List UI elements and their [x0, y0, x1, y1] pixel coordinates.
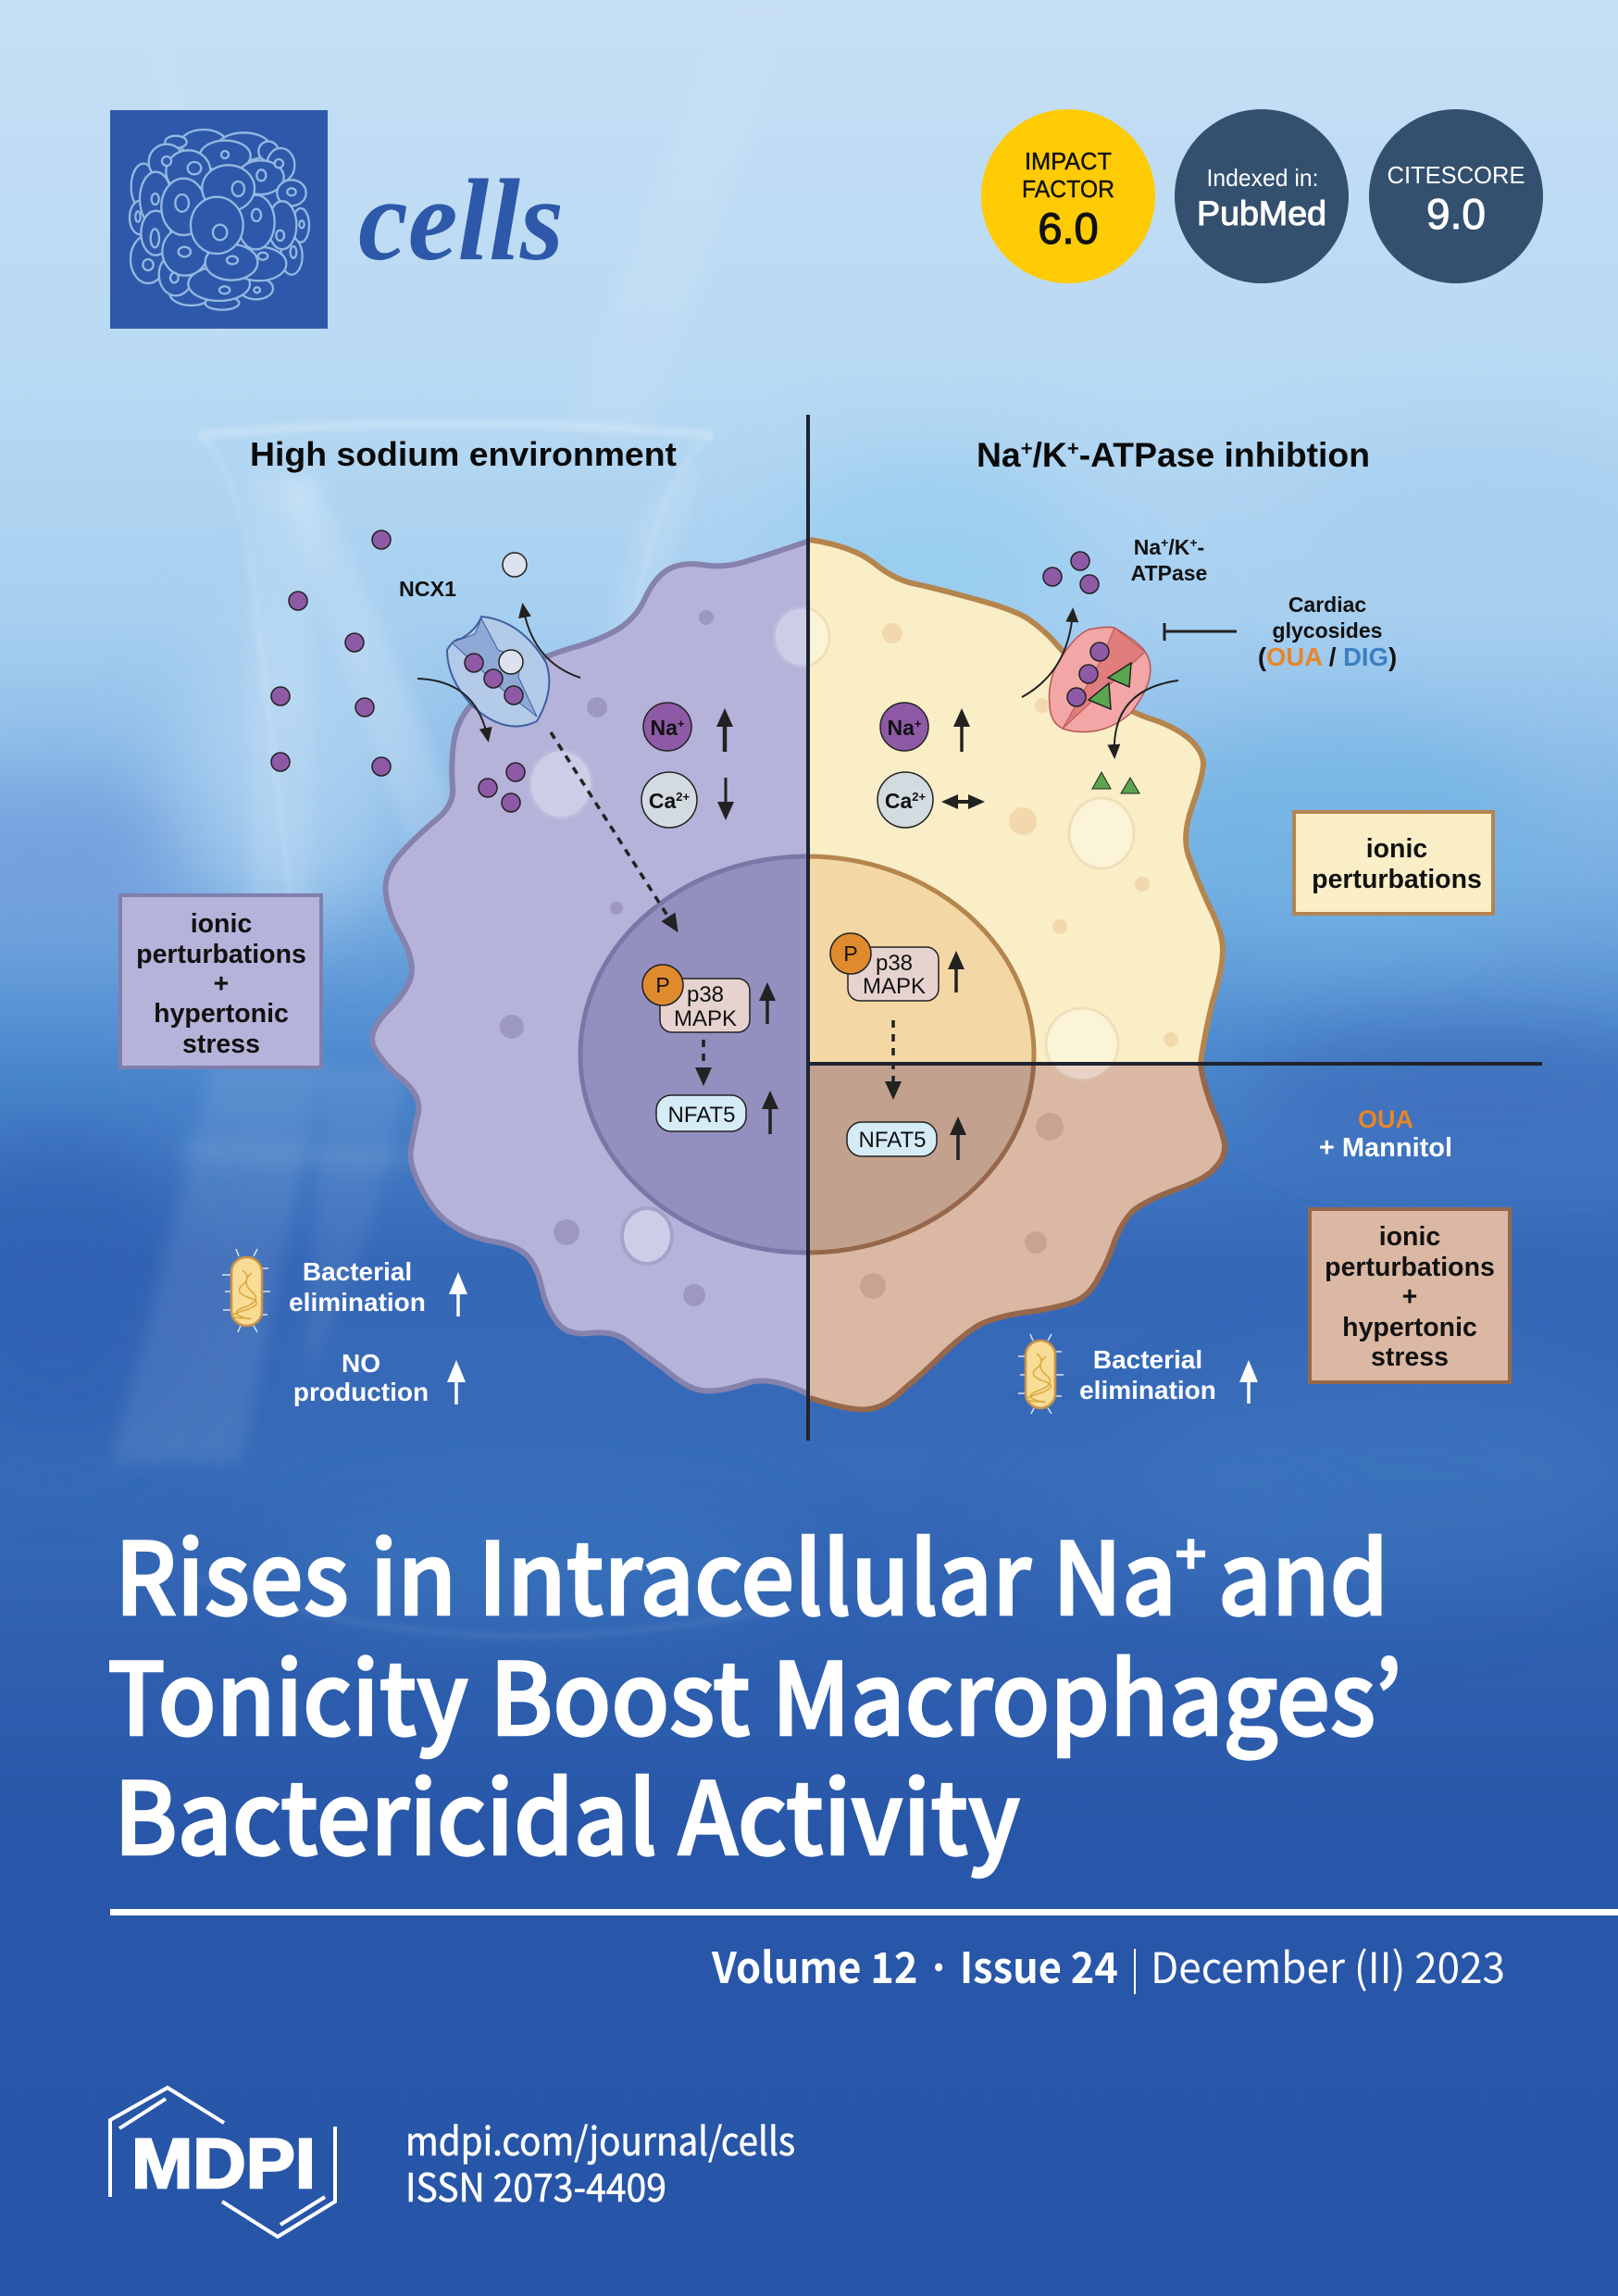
article title: Tonicity Boost Macrophages’ — [107, 1620, 1402, 1765]
rule under title — [110, 1909, 1618, 1915]
issue line: December (II) 2023 — [1151, 1935, 1505, 1996]
badge: CiteScore: 9.0 — [1426, 190, 1486, 238]
label: cardiac glycosides — [1258, 593, 1397, 671]
Na+ ion, increased: + — [678, 717, 685, 730]
upper membrane — [810, 540, 1223, 1064]
badge: impact factor: 6.0 — [1038, 204, 1099, 253]
Na+ ion, increased: Na — [887, 716, 915, 740]
heading: ATPase inhibition: -ATPase inhibtion — [1079, 435, 1370, 474]
Ca2+ ion, unchanged: 2+ — [912, 790, 927, 804]
article title: Bactericidal Activity — [114, 1740, 1020, 1884]
box: ionic perturbations and hypertonic stress, left: hypertonic — [154, 999, 289, 1029]
p38 MAPK: p38 — [687, 982, 724, 1007]
badge: PubMed — [1175, 109, 1349, 283]
badge: impact factor: IMPACT — [1025, 147, 1112, 175]
label: ATPase: ATPase — [1131, 561, 1207, 585]
heading: ATPase inhibition: /K — [1033, 435, 1067, 474]
box: ionic perturbations and hypertonic stress, lower right: stress — [1371, 1342, 1449, 1372]
journal url and ISSN: ISSN 2073-4409 — [405, 2157, 666, 2214]
journal url and ISSN: mdpi.com/journal/cells — [405, 2111, 795, 2167]
label: NO production: NO — [342, 1349, 380, 1378]
p38 MAPK — [642, 965, 767, 1032]
badge: PubMed: PubMed — [1197, 194, 1326, 232]
box: ionic perturbations and hypertonic stress, left: ionic — [191, 909, 252, 939]
badge: impact factor: FACTOR — [1022, 175, 1114, 203]
Na+ ion, increased: Na — [650, 716, 678, 740]
badge: PubMed: Indexed in: — [1207, 164, 1318, 192]
NFAT5 — [656, 1095, 770, 1134]
quadrant axes — [806, 415, 1542, 1441]
badge: impact factor — [981, 109, 1155, 283]
issue line: Volume 12 · Issue 24 — [711, 1935, 1118, 1996]
dashed arrow p38 to NFAT5 — [891, 1020, 895, 1095]
Na+ ion, increased: + — [915, 717, 922, 730]
Na+ ion, increased — [880, 703, 962, 752]
Ca2+ ion, unchanged — [877, 772, 985, 828]
issue line — [711, 1935, 1505, 1996]
heading: high sodium environment: High sodium environment — [250, 435, 677, 473]
Na+ ion, increased — [643, 703, 725, 752]
extracellular Na+ ions — [271, 530, 525, 812]
p38 MAPK — [830, 933, 956, 1001]
label: bacterial elimination, right — [1079, 1345, 1249, 1404]
cytoplasm spots and vesicles — [500, 607, 829, 1306]
label: Na+/K+-ATPase: + — [1161, 535, 1168, 550]
badge: CiteScore: CITESCORE — [1387, 161, 1525, 189]
journal url and ISSN — [405, 2111, 795, 2214]
Na+/K+-ATPase pump — [1050, 627, 1151, 732]
p38 MAPK: P — [655, 973, 670, 997]
dashed arrow p38 to NFAT5 — [702, 1040, 705, 1081]
arrow: glycoside in — [1114, 680, 1178, 755]
box: ionic perturbations and hypertonic stress, lower right: hypertonic — [1342, 1313, 1477, 1342]
label: Na+/K+-ATPase: + — [1189, 535, 1198, 550]
label: cardiac glycosides: glycosides — [1273, 618, 1382, 643]
article title: and — [1218, 1500, 1388, 1644]
box: ionic perturbations and hypertonic stress, lower right: + — [1402, 1282, 1417, 1312]
lower membrane — [810, 1064, 1225, 1409]
p38 MAPK: MAPK — [674, 1006, 737, 1031]
box: ionic perturbations and hypertonic stress, left: stress — [182, 1029, 260, 1059]
label: Na+/K+-ATPase: /K — [1168, 535, 1190, 559]
label: cardiac glycosides: (OUA / DIG) — [1258, 643, 1397, 671]
label: bacterial elimination, right: Bacterial — [1093, 1345, 1202, 1374]
panel: left cell, high sodium — [271, 530, 1034, 1395]
box: ionic perturbations, right: perturbations — [1312, 865, 1482, 894]
label: NCX1: NCX1 — [399, 577, 456, 601]
journal logo tile — [110, 110, 328, 329]
article title — [107, 1500, 1402, 1884]
upper cell body — [810, 540, 1223, 1064]
box: ionic perturbations and hypertonic stress, lower right: ionic — [1379, 1222, 1440, 1252]
cell body — [372, 541, 810, 1395]
p38 MAPK: p38 — [876, 951, 913, 976]
MDPI logo — [110, 2088, 335, 2237]
green glycoside triangles — [1092, 772, 1139, 793]
label: bacterial elimination, left: elimination — [289, 1288, 426, 1316]
label: bacterial elimination, left: Bacterial — [303, 1257, 412, 1286]
p38 MAPK: P — [843, 942, 858, 966]
label: NO production — [293, 1349, 456, 1406]
upper nucleus — [810, 854, 1037, 1062]
article title: + — [1176, 1512, 1206, 1590]
badge: CiteScore — [1369, 109, 1543, 283]
inhibition bar — [1164, 623, 1237, 641]
heading: ATPase inhibition: Na — [977, 435, 1021, 474]
arrow: Na+ in — [417, 679, 488, 739]
NFAT5: NFAT5 — [859, 1128, 926, 1153]
label: bacterial elimination, left — [289, 1257, 458, 1316]
icon: bacterium, right — [1018, 1334, 1064, 1414]
arrow: Ca2+ out — [523, 606, 580, 678]
label: OUA + Mannitol — [1319, 1105, 1452, 1163]
lower cell body — [810, 1064, 1225, 1409]
extracellular Na+ ions — [1043, 552, 1099, 593]
box: ionic perturbations, right — [1294, 812, 1493, 914]
cytoplasm spots and vesicles — [774, 607, 1178, 1299]
icon: bacterium, left — [222, 1249, 270, 1332]
box: ionic perturbations and hypertonic stress, lower right — [1310, 1209, 1510, 1382]
NCX1 transporter — [447, 617, 549, 727]
label: OUA + Mannitol: + Mannitol — [1319, 1133, 1452, 1163]
label: NO production: production — [293, 1378, 429, 1406]
journal name: cells — [358, 156, 564, 285]
p38 MAPK: MAPK — [863, 974, 926, 999]
label: bacterial elimination, right: elimination — [1079, 1376, 1216, 1404]
nucleus — [578, 854, 806, 1255]
article title: Rises in Intracellular Na — [115, 1500, 1176, 1644]
Ca2+ ion, decreased — [641, 772, 726, 828]
Ca2+ ion, decreased: 2+ — [676, 790, 691, 804]
label: Na+/K+-ATPase: - — [1198, 535, 1204, 559]
lower nucleus — [810, 1066, 1037, 1255]
Ca2+ ion outside — [503, 553, 527, 577]
box: ionic perturbations and hypertonic stress, lower right: perturbations — [1325, 1253, 1495, 1282]
arrow: Na+ out — [1022, 611, 1073, 697]
panel: right cell, ATPase inhibition — [810, 537, 1396, 1413]
box: ionic perturbations and hypertonic stress, left: perturbations — [136, 940, 306, 969]
box: ionic perturbations and hypertonic stress, left — [120, 895, 321, 1067]
Ca2+ ion, decreased: Ca — [649, 789, 676, 813]
heading: ATPase inhibition: + — [1021, 437, 1033, 460]
label: Na+/K+-ATPase: Na — [1134, 535, 1161, 559]
dotted arrow to nucleus — [551, 732, 676, 929]
heading: ATPase inhibition: + — [1067, 437, 1079, 460]
box: ionic perturbations, right: ionic — [1366, 834, 1427, 864]
NFAT5 — [847, 1121, 958, 1160]
label: OUA + Mannitol: OUA — [1358, 1105, 1413, 1133]
NFAT5: NFAT5 — [668, 1103, 735, 1128]
label: cardiac glycosides: Cardiac — [1288, 593, 1366, 617]
Ca2+ ion, unchanged: Ca — [885, 789, 912, 813]
box: ionic perturbations and hypertonic stress, left: + — [214, 969, 229, 999]
MDPI logo: MDPI — [131, 2125, 316, 2203]
